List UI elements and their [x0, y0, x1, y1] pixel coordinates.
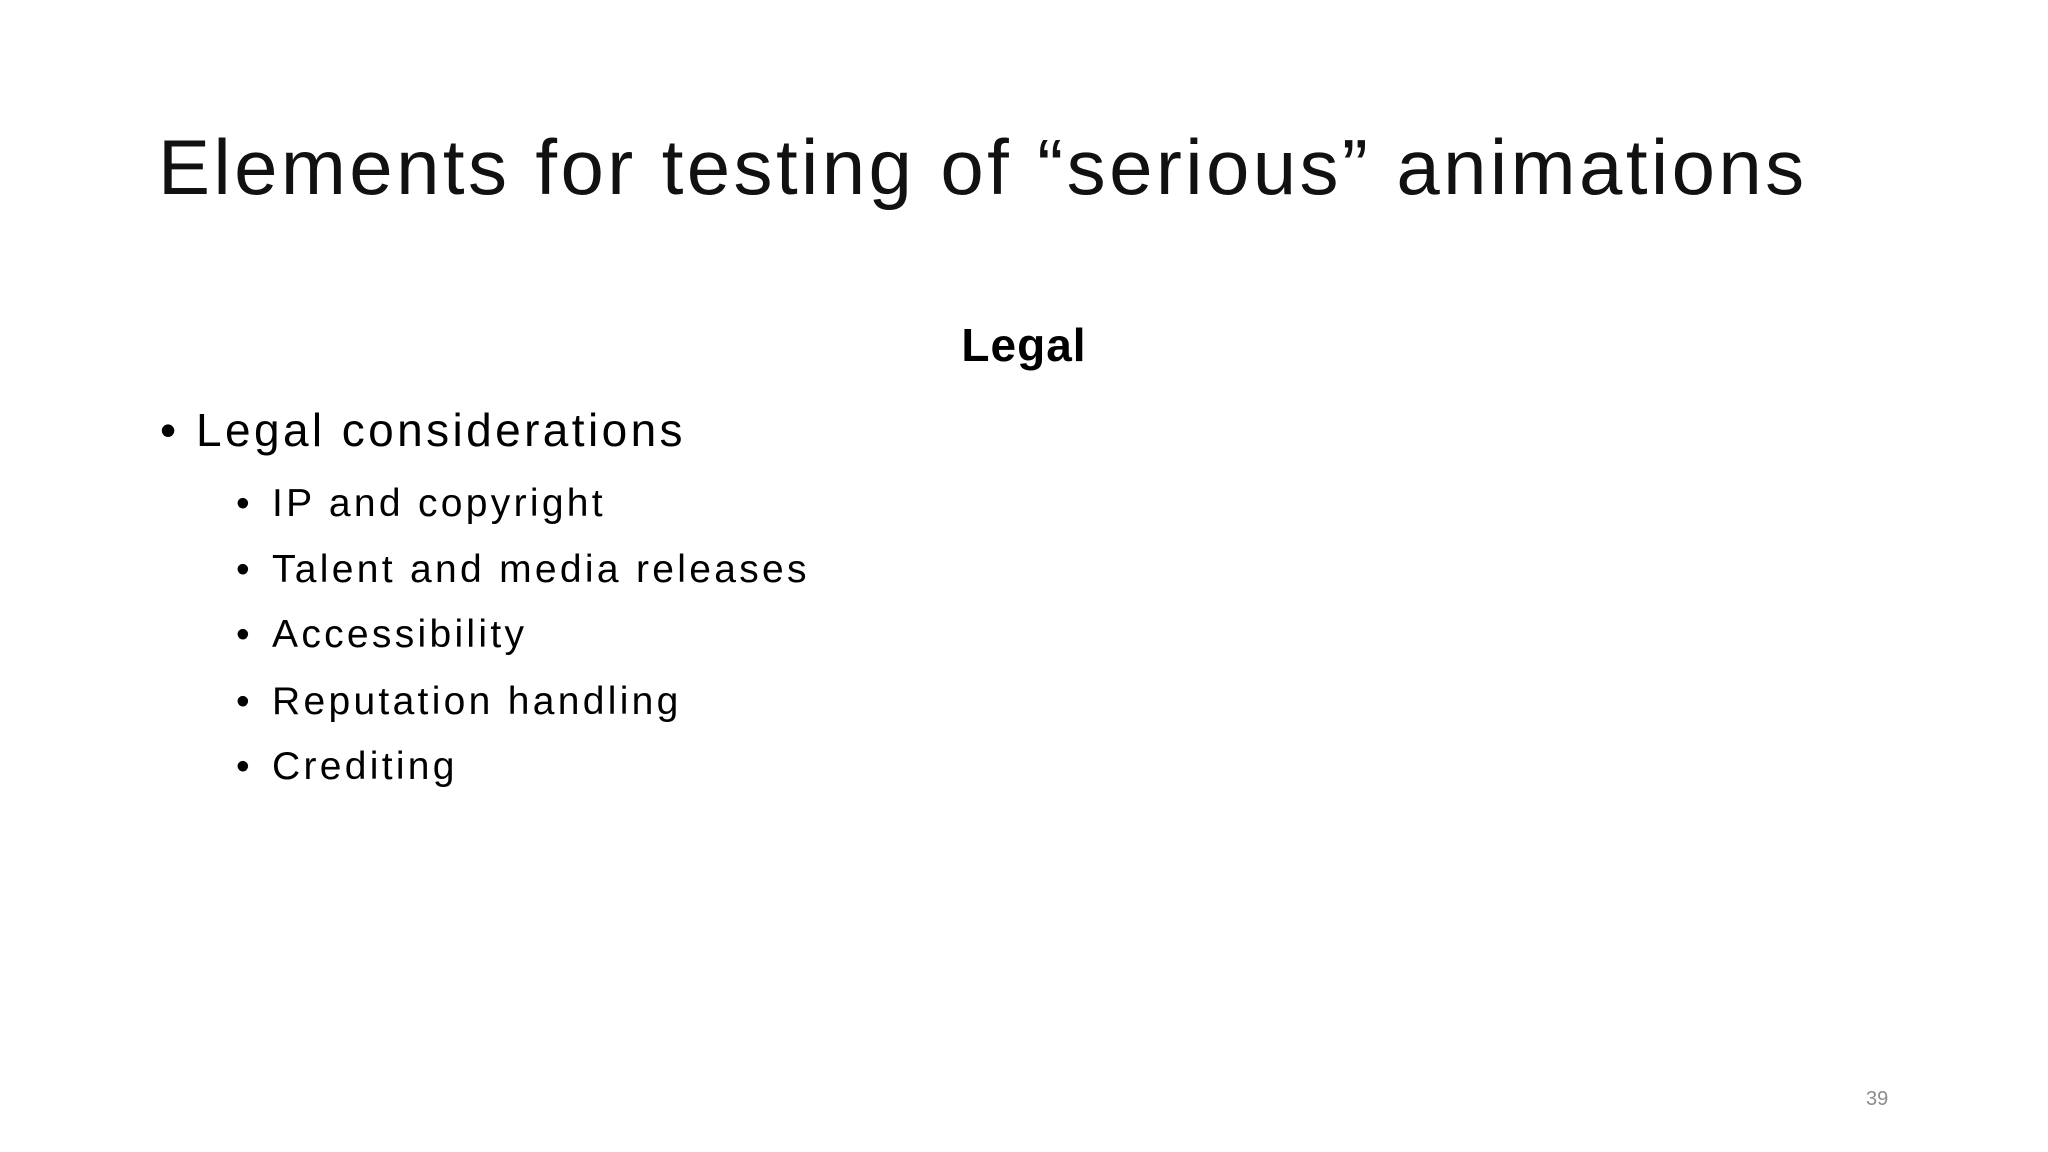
bullet list	[160, 404, 810, 788]
sub-bullet: IP and copyright: IP and copyright	[272, 482, 606, 525]
heading: Legal: Legal	[961, 319, 1087, 371]
sub-bullet: Talent and media releases: •	[236, 548, 253, 591]
sub-bullet: IP and copyright: •	[236, 482, 253, 525]
sub-bullet: Crediting: •	[236, 745, 253, 788]
sub-bullet: Crediting: Crediting	[272, 745, 458, 788]
title: Elements for testing of “serious” animations	[158, 123, 1808, 211]
sub-bullet: Reputation handling: •	[236, 680, 253, 723]
sub-bullet: Accessibility: Accessibility	[272, 613, 527, 656]
sub-bullet: Accessibility: •	[236, 613, 253, 656]
sub-bullet: Talent and media releases: Talent and media releases	[272, 548, 810, 591]
bullet: Legal considerations: •	[160, 404, 180, 456]
page number: 39	[1866, 1088, 1888, 1110]
bullet: Legal considerations: Legal considerations	[196, 404, 686, 456]
sub-bullet: Reputation handling: Reputation handling	[272, 680, 682, 723]
